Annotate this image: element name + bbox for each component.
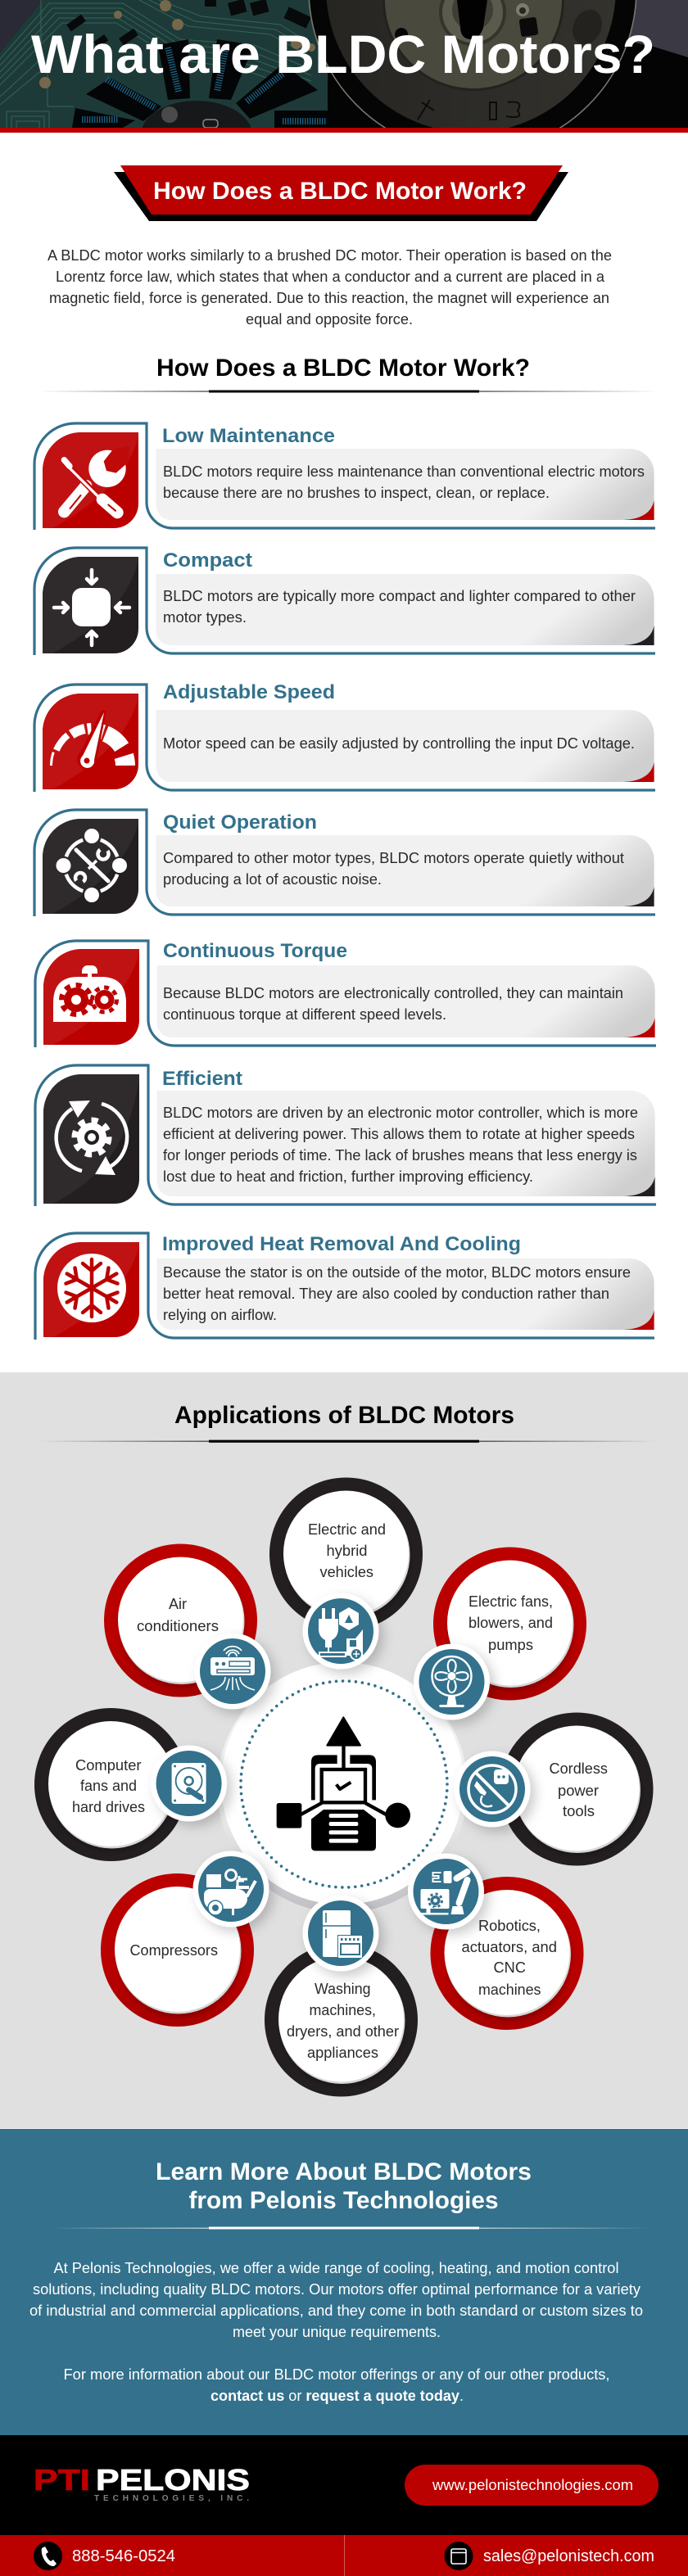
intro paragraph: A BLDC motor works similarly to a brushed DC motor. Their operation is based on the bbox=[48, 247, 612, 264]
bubble: computer fans and hard drives: fans and bbox=[80, 1778, 137, 1794]
badge: cordless no-plug icon bbox=[454, 1751, 531, 1828]
text panel bbox=[156, 449, 654, 520]
icon: gearbox bbox=[53, 965, 126, 1022]
bubble: electric fans bbox=[433, 1548, 586, 1700]
website button: www.pelonistechnologies.com bbox=[432, 2477, 633, 2493]
email contact: sales@pelonistech.com bbox=[483, 2547, 654, 2565]
badge: robotics icon bbox=[408, 1854, 484, 1929]
bubble: robotics actuators cnc machines: Robotics, bbox=[478, 1918, 541, 1934]
badge: fan icon bbox=[414, 1644, 490, 1720]
panel: heat removal and cooling bbox=[35, 1233, 654, 1340]
bubble: electric fans: pumps bbox=[488, 1637, 533, 1653]
bubble: washing machines dryers appliances: appliances bbox=[307, 2045, 378, 2061]
bubble: air conditioners bbox=[104, 1544, 257, 1697]
heading: Continuous Torque bbox=[163, 940, 347, 962]
body text: because there are no brushes to inspect, clean, or replace. bbox=[163, 485, 550, 501]
body text: At Pelonis Technologies, we offer a wide range of cooling, heating, and motion control bbox=[54, 2260, 619, 2276]
body text: Because BLDC motors are electronically controlled, they can maintain bbox=[163, 985, 623, 1001]
body text: Compared to other motor types, BLDC motors operate quietly without bbox=[163, 850, 624, 866]
body text bbox=[163, 588, 636, 626]
bubble: air conditioners: conditioners bbox=[137, 1618, 219, 1634]
bubble: electric fans: Electric fans, bbox=[468, 1593, 553, 1610]
section heading: how it works bbox=[39, 355, 658, 393]
intro paragraph: Lorentz force law, which states that when a conductor and a current are placed in a bbox=[56, 269, 605, 285]
website button bbox=[405, 2465, 659, 2506]
body text: BLDC motors are driven by an electronic motor controller, which is more bbox=[163, 1105, 638, 1121]
body text bbox=[163, 1264, 631, 1323]
panel: learn more bbox=[0, 2129, 688, 2435]
panel: quiet operation bbox=[34, 810, 655, 916]
panel: efficient bbox=[35, 1065, 656, 1206]
body text: meet your unique requirements. bbox=[233, 2324, 441, 2340]
bubble: electric and hybrid vehicles: vehicles bbox=[319, 1564, 373, 1580]
red rule bbox=[0, 128, 688, 133]
heading: Improved Heat Removal And Cooling bbox=[162, 1233, 521, 1255]
icon: motor controller bbox=[277, 1717, 410, 1851]
body text: producing a lot of acoustic noise. bbox=[163, 871, 382, 888]
intro paragraph: equal and opposite force. bbox=[246, 311, 413, 328]
icon: wrench and screwdriver bbox=[64, 446, 129, 513]
circuit board bbox=[0, 0, 328, 128]
logo bbox=[34, 2463, 250, 2503]
bubble: cordless power tools: power bbox=[558, 1783, 599, 1799]
bubble: robotics actuators cnc machines: actuators, and bbox=[462, 1939, 557, 1955]
bubble: compressors: Compressors bbox=[129, 1942, 218, 1959]
intro paragraph bbox=[48, 247, 612, 328]
phone contact: 888-546-0524 bbox=[72, 2547, 175, 2565]
panel: compact bbox=[34, 548, 655, 655]
text panel bbox=[156, 835, 654, 906]
header banner with motor photo background bbox=[0, 0, 688, 133]
bubble: electric and hybrid vehicles: Electric and bbox=[308, 1521, 386, 1538]
body text: contact us or request a quote today. bbox=[210, 2388, 464, 2404]
body text: For more information about our BLDC motor offerings or any of our other products, bbox=[64, 2366, 609, 2383]
bubble: cordless power tools: Cordless bbox=[549, 1760, 608, 1777]
ribbon heading: How Does a BLDC Motor Work? bbox=[153, 178, 527, 205]
icon: speedometer bbox=[40, 711, 145, 818]
bubble: robotics actuators cnc machines: machines bbox=[478, 1982, 541, 1998]
bubble: washing machines dryers appliances: Washing bbox=[315, 1981, 370, 1997]
bubble: computer fans and hard drives: Computer bbox=[75, 1757, 142, 1774]
phone contact bbox=[34, 2542, 175, 2570]
body text: efficient at delivering power. This allows them to rotate at higher speeds bbox=[163, 1126, 635, 1142]
bubble: robotics actuators cnc machines: CNC bbox=[493, 1959, 526, 1976]
bubble: electric and hybrid vehicles bbox=[269, 1477, 423, 1631]
panel: adjustable speed bbox=[34, 681, 655, 818]
icon: gear with rotation arrows bbox=[57, 1100, 127, 1175]
heading: learn more bbox=[49, 2158, 651, 2229]
text panel bbox=[157, 1091, 655, 1196]
body text: motor types. bbox=[163, 609, 247, 626]
bubble: electric and hybrid vehicles: hybrid bbox=[326, 1543, 367, 1559]
bubble: washing machines dryers appliances: dryers, and other bbox=[287, 2023, 399, 2040]
panel: low maintenance bbox=[34, 423, 655, 530]
logo: TECHNOLOGIES, INC. bbox=[94, 2494, 249, 2503]
email contact bbox=[444, 2542, 654, 2570]
body text bbox=[163, 850, 624, 888]
body text: Motor speed can be easily adjusted by controlling the input DC voltage. bbox=[163, 735, 635, 752]
heading: Quiet Operation bbox=[163, 811, 317, 834]
heading: learn more: from Pelonis Technologies bbox=[188, 2187, 498, 2214]
panel: applications section bbox=[0, 1372, 688, 2129]
bubble: washing machines dryers appliances: machines, bbox=[310, 2002, 376, 2018]
footer: black band bbox=[0, 2435, 688, 2535]
header photo bbox=[0, 0, 688, 128]
body text: of industrial and commercial applications, and they come in both standard or custom sizes to bbox=[29, 2303, 643, 2319]
body text: lost due to heat and friction, further improving efficiency. bbox=[163, 1168, 533, 1185]
badge: air conditioner icon bbox=[195, 1633, 270, 1710]
body text: Because the stator is on the outside of the motor, BLDC motors ensure bbox=[163, 1264, 631, 1281]
body text: better heat removal. They are also cooled by conduction rather than bbox=[163, 1286, 609, 1302]
bubble: computer fans and hard drives bbox=[34, 1708, 188, 1861]
body text: for longer periods of time. The lack of brushes means that less energy is bbox=[163, 1147, 637, 1164]
motor disc bbox=[308, 0, 637, 128]
body text: continuous torque at different speed levels. bbox=[163, 1006, 446, 1023]
heading: Low Maintenance bbox=[162, 425, 335, 447]
heading: Efficient bbox=[162, 1068, 242, 1090]
badge: compressor icon bbox=[193, 1851, 269, 1927]
text panel bbox=[157, 965, 655, 1037]
badge: appliances icon bbox=[303, 1895, 378, 1972]
badge: hard drive icon bbox=[151, 1746, 227, 1821]
text panel bbox=[157, 1259, 654, 1330]
intro paragraph: magnetic field, force is generated. Due to this reaction, the magnet will experience an bbox=[49, 290, 609, 306]
heading: learn more: Learn More About BLDC Motors bbox=[156, 2158, 532, 2185]
footer: contact bar bbox=[0, 2535, 688, 2576]
bubble: compressors bbox=[101, 1873, 254, 2027]
bubble: cordless power tools: tools bbox=[563, 1803, 595, 1819]
icon: snowflake bbox=[57, 1254, 126, 1322]
section heading: applications bbox=[39, 1402, 658, 1443]
section heading: how it works: How Does a BLDC Motor Work? bbox=[156, 355, 530, 382]
body text: relying on airflow. bbox=[163, 1307, 277, 1323]
body text: BLDC motors require less maintenance than conventional electric motors bbox=[163, 463, 645, 480]
bubble: robotics actuators cnc machines bbox=[431, 1877, 583, 2030]
title: What are BLDC Motors? bbox=[31, 24, 655, 84]
body text bbox=[163, 1105, 638, 1185]
bubble: washing machines dryers appliances bbox=[265, 1944, 418, 2096]
body text bbox=[163, 985, 623, 1023]
bubble: cordless power tools bbox=[500, 1713, 654, 1865]
logo: PELONIS bbox=[96, 2463, 250, 2497]
ribbon heading bbox=[114, 165, 568, 221]
bubble: computer fans and hard drives: hard drives bbox=[72, 1799, 145, 1815]
badge: vehicles icon bbox=[303, 1593, 378, 1669]
section heading: applications: Applications of BLDC Motors bbox=[174, 1402, 514, 1429]
icon: compress arrows bbox=[54, 570, 129, 645]
body text bbox=[163, 463, 645, 501]
text panel bbox=[156, 574, 654, 645]
text panel bbox=[156, 710, 654, 782]
icon: tools ring bbox=[56, 829, 127, 902]
logo: PTI bbox=[34, 2463, 90, 2497]
body text: solutions, including quality BLDC motors. Our motors offer optimal performance for a variety bbox=[33, 2281, 640, 2298]
body text: BLDC motors are typically more compact and lighter compared to other bbox=[163, 588, 636, 604]
stator coils bbox=[72, 39, 328, 128]
bubble: air conditioners: Air bbox=[169, 1596, 187, 1612]
central hub with BLDC motor icon bbox=[217, 1662, 468, 1913]
panel: continuous torque bbox=[35, 940, 656, 1047]
heading: Adjustable Speed bbox=[163, 681, 335, 703]
body text bbox=[29, 2260, 643, 2404]
bubble: electric fans: blowers, and bbox=[468, 1615, 553, 1631]
heading: Compact bbox=[163, 549, 252, 572]
